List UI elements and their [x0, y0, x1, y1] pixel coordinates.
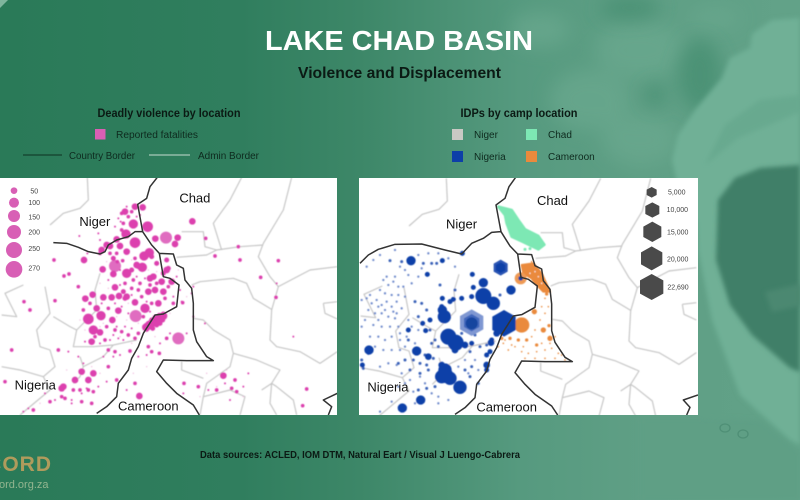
country labels, right map: Cameroon	[476, 399, 537, 414]
country labels, right map: Niger	[446, 217, 478, 232]
left map: fatalities	[0, 177, 337, 415]
country labels, left map: Chad	[179, 191, 210, 206]
subtitle: Violence and Displacement	[298, 65, 502, 82]
right legend: IDPs	[452, 108, 595, 163]
left legend: deadly violence	[23, 108, 260, 162]
size legend, right map: 20,000	[667, 256, 688, 263]
size legend, left map: 250	[28, 246, 40, 253]
country borders, right map	[360, 177, 698, 415]
right legend: IDPs: Chad	[548, 130, 572, 141]
size legend, left map	[6, 187, 40, 278]
size legend, right map: 5,000	[668, 189, 686, 196]
size legend, left map: 50	[30, 189, 38, 196]
photo: man in turban	[640, 18, 800, 500]
right legend: IDPs: Niger	[474, 130, 499, 141]
right legend: IDPs: Cameroon	[548, 152, 595, 163]
country labels, right map: Nigeria	[367, 379, 409, 394]
size legend, right map: 10,000	[667, 207, 688, 214]
left legend: deadly violence: Admin Border	[198, 151, 260, 162]
size legend, left map: 100	[28, 200, 40, 207]
left legend: deadly violence: Country Border	[69, 151, 136, 162]
right legend: IDPs: IDPs by camp location	[460, 108, 578, 120]
Cameroon camps	[498, 262, 565, 360]
country labels, right map: Chad	[537, 193, 568, 208]
fatality bubbles	[5, 207, 307, 412]
country labels, right map	[367, 193, 568, 414]
country borders, left map	[53, 177, 337, 415]
size legend, right map: 15,000	[667, 229, 688, 236]
right legend: IDPs: Nigeria	[474, 152, 506, 163]
decorative corner mark	[0, 0, 8, 8]
country labels, left map: Cameroon	[118, 399, 179, 414]
country labels, left map: Nigeria	[15, 377, 57, 392]
right map: IDPs	[359, 177, 698, 416]
country labels, left map	[15, 191, 210, 414]
country labels, left map: Niger	[79, 214, 111, 229]
left legend: deadly violence: Reported fatalities	[116, 130, 198, 141]
size legend, left map: 150	[28, 215, 40, 222]
left legend: deadly violence: Deadly violence by location	[98, 108, 240, 120]
title: LAKE CHAD BASIN	[265, 25, 533, 56]
admin borders, right map	[361, 178, 696, 416]
size legend, left map: 200	[28, 229, 40, 236]
admin borders, left map	[2, 177, 337, 415]
size legend, right map: 22,690	[667, 284, 689, 291]
size legend, left map: 270	[28, 266, 40, 273]
Chad camps	[498, 207, 544, 249]
logo: ACCORD, clipped by the left edge	[0, 453, 52, 491]
data sources note: Data sources: ACLED, IOM DTM, Natural Eart / Visual J Luengo-Cabrera	[200, 449, 520, 461]
Nigeria camps	[362, 250, 521, 412]
size legend, right map	[640, 187, 689, 300]
